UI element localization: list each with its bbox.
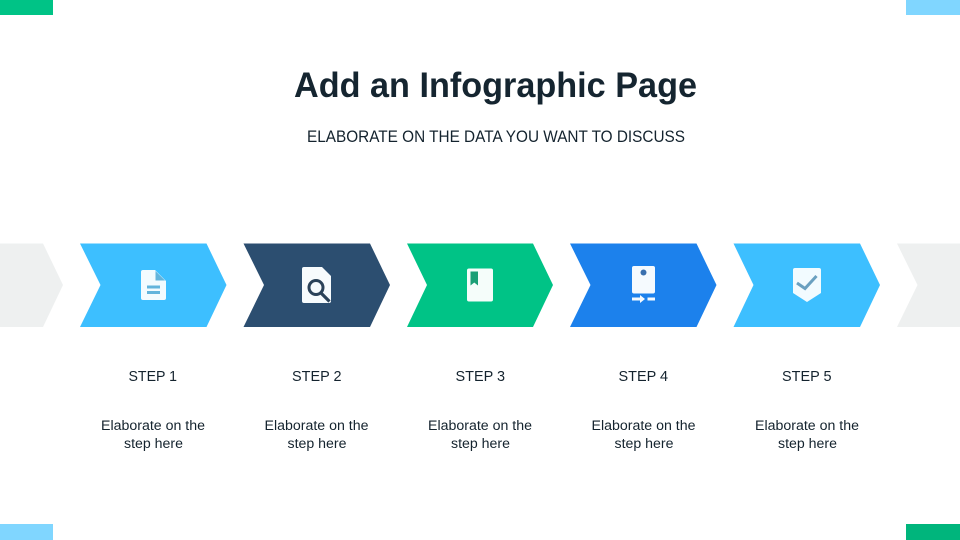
step description 5: step here — [778, 436, 837, 451]
icon: shield check — [793, 268, 821, 302]
step description 1 — [101, 418, 205, 451]
step description 4: step here — [614, 436, 674, 451]
step 4 — [570, 244, 716, 451]
faded chevron: right — [897, 244, 960, 327]
chevron: step 4 — [570, 244, 716, 327]
icon: document — [141, 270, 166, 300]
step label 3: STEP 3 — [456, 368, 505, 385]
step description 4: Elaborate on the — [592, 418, 696, 433]
corner bar: top left — [0, 0, 53, 15]
step description 4 — [592, 418, 696, 451]
step description 5 — [755, 418, 859, 451]
step 2 — [244, 244, 390, 451]
step label 1: STEP 1 — [128, 368, 177, 385]
chevron: step 2 — [244, 244, 390, 327]
step description 5: Elaborate on the — [755, 418, 859, 433]
corner bar: bottom right — [906, 524, 960, 540]
step description 3: Elaborate on the — [428, 418, 532, 433]
step label 5: STEP 5 — [782, 368, 832, 385]
step description 2 — [264, 418, 368, 451]
step label 4: STEP 4 — [618, 368, 668, 385]
step description 1: Elaborate on the — [101, 418, 205, 433]
chevron: step 1 — [80, 244, 226, 327]
step label 2: STEP 2 — [292, 368, 342, 385]
chevron: step 5 — [734, 244, 880, 327]
step description 1: step here — [124, 436, 183, 451]
corner bar: top right — [906, 0, 960, 15]
icon: document search — [302, 267, 331, 303]
step description 3 — [428, 418, 532, 451]
subtitle: ELABORATE ON THE DATA YOU WANT TO DISCUSS — [307, 128, 685, 146]
step description 3: step here — [451, 436, 510, 451]
icon: device with arrow — [632, 266, 655, 303]
step 1 — [80, 244, 226, 451]
step description 2: Elaborate on the — [264, 418, 368, 433]
icon: bookmark book — [467, 268, 493, 302]
faded chevron: left — [0, 244, 63, 327]
title: Add an Infographic Page — [294, 66, 697, 105]
corner bar: bottom left — [0, 524, 53, 540]
chevron: step 3 — [407, 244, 553, 327]
step description 2: step here — [288, 436, 346, 451]
step 5 — [734, 244, 880, 451]
step 3 — [407, 244, 553, 451]
